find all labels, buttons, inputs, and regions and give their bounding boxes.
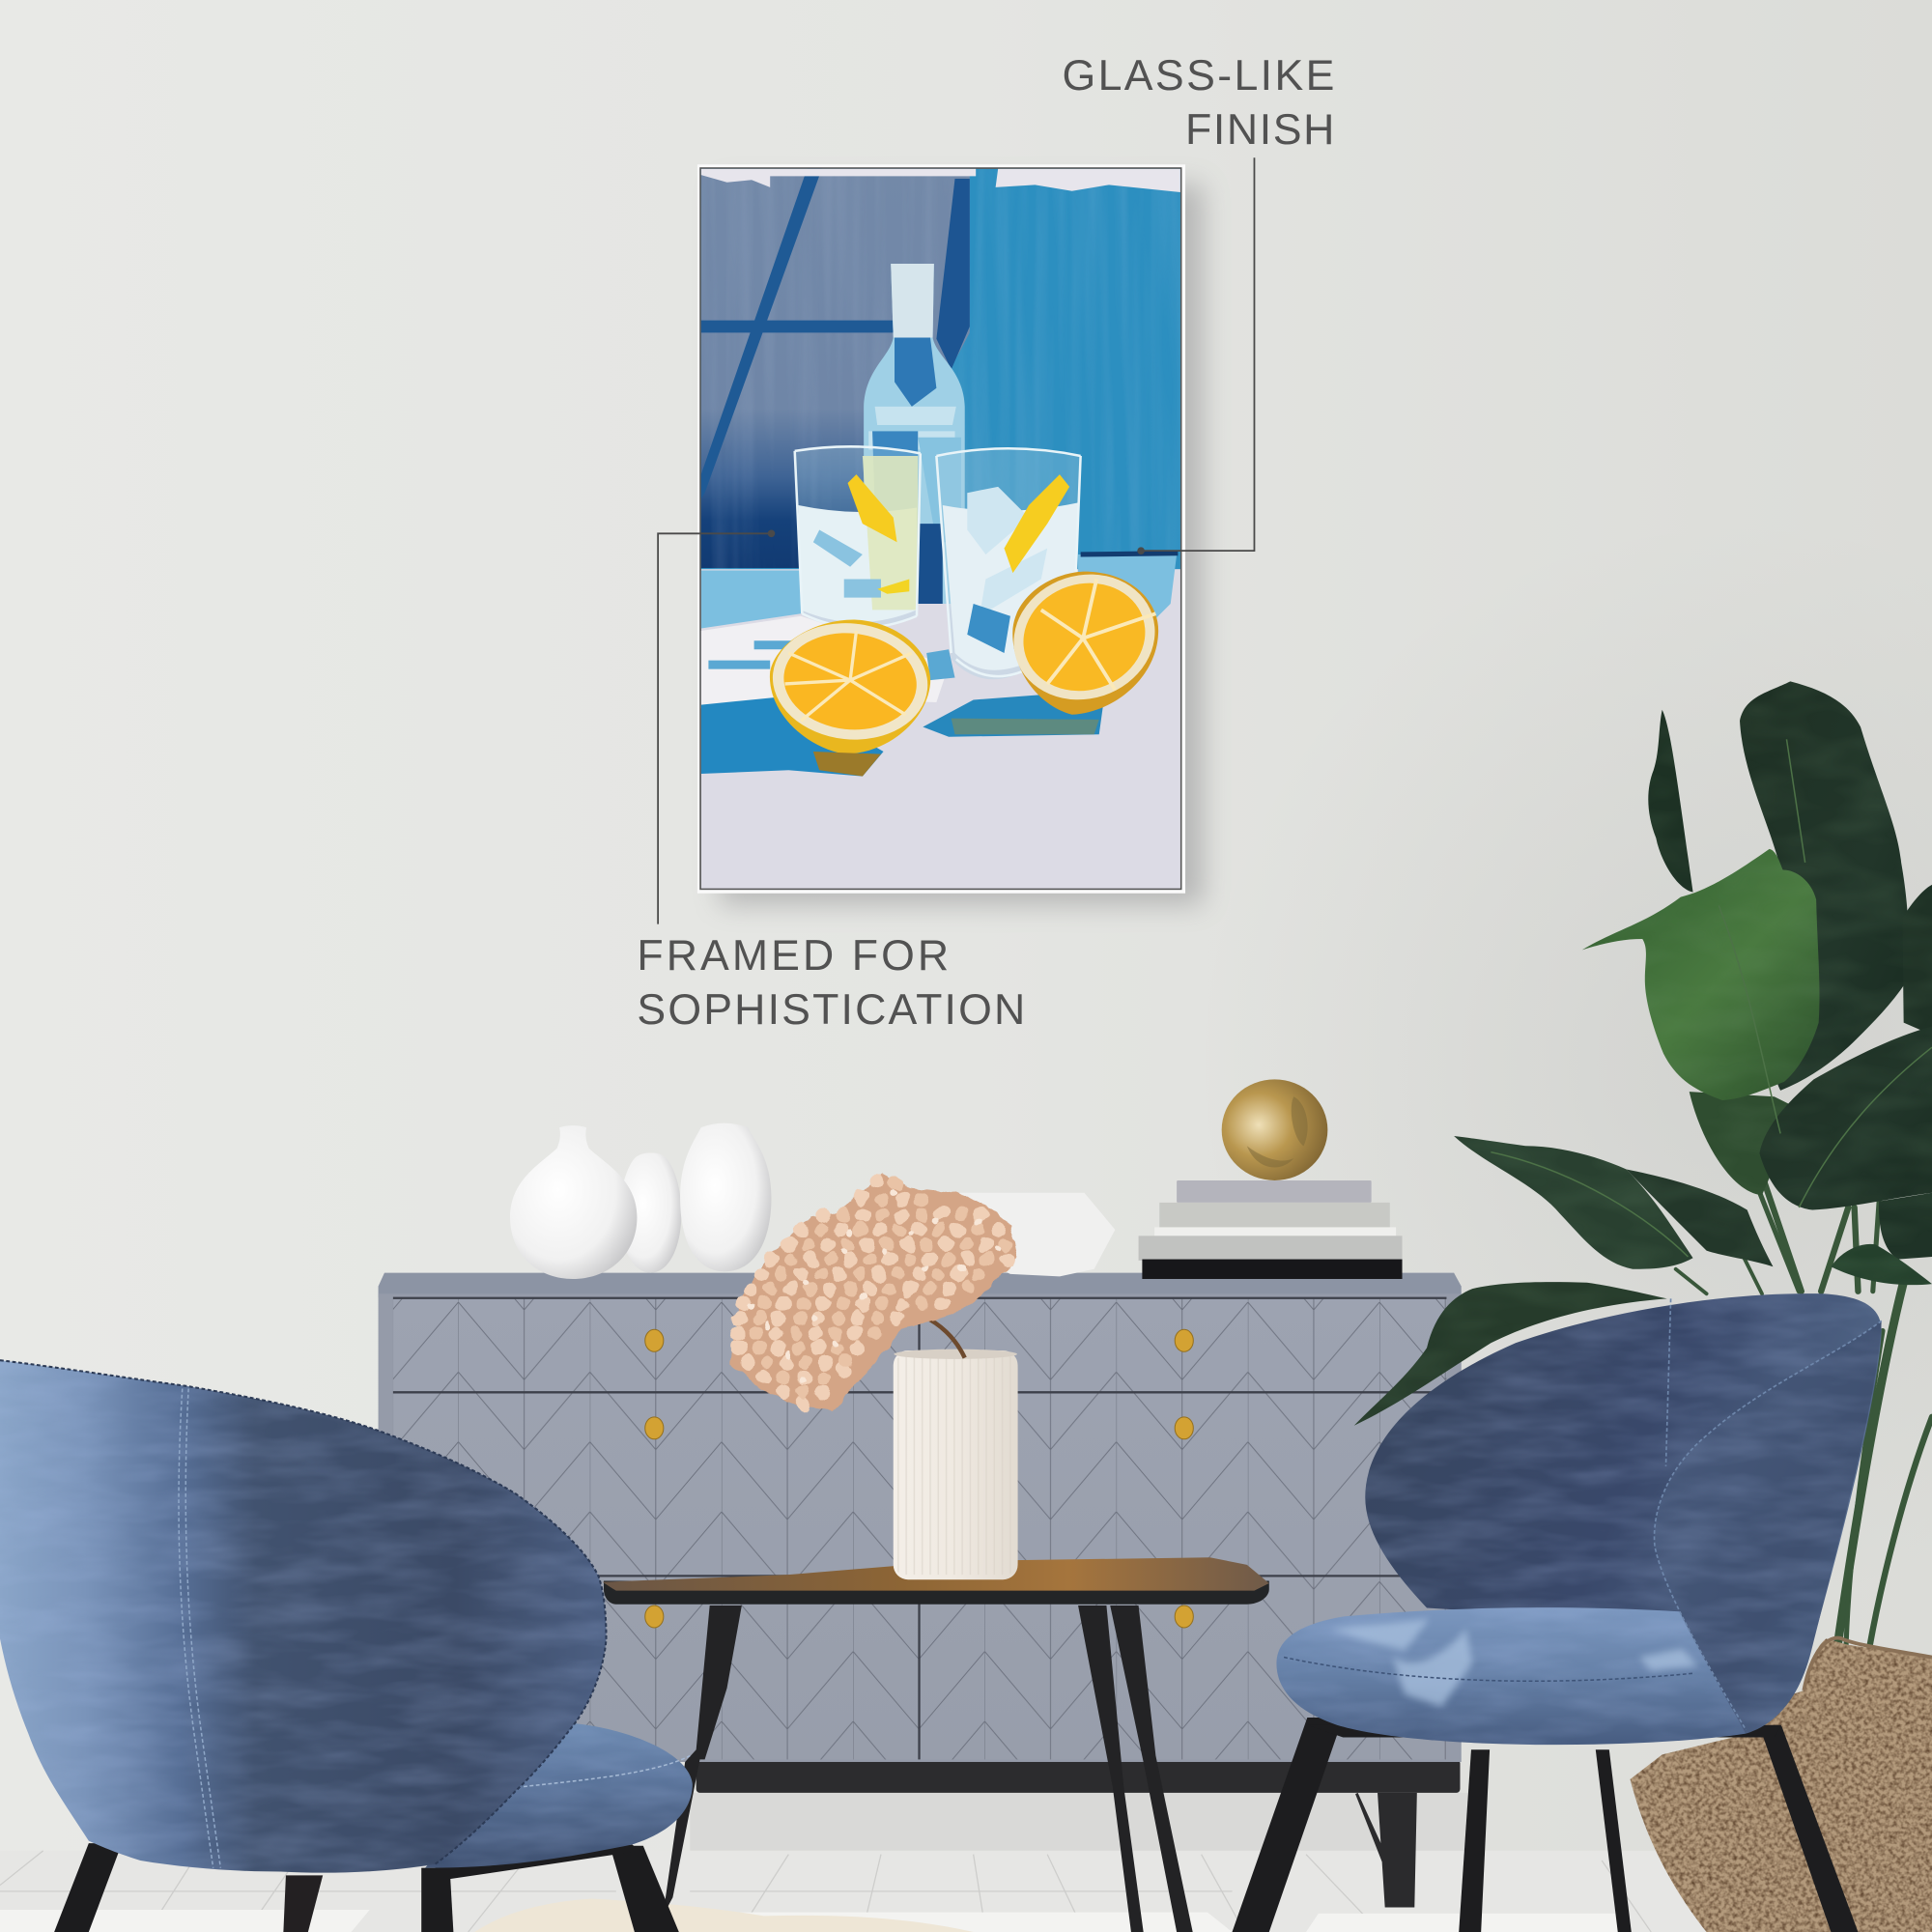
light blue table band <box>701 554 1177 629</box>
label text: GLASS-LIKE <box>1062 52 1334 99</box>
right glass <box>936 448 1081 679</box>
chair legs <box>54 1843 122 1932</box>
top unpainted edge <box>701 169 1180 192</box>
left glass <box>795 446 921 628</box>
label text: SOPHISTICATION <box>637 986 1025 1034</box>
label text: FINISH <box>1185 106 1334 154</box>
seat stitching <box>524 1756 690 1786</box>
table legs <box>663 1605 742 1916</box>
white strip and strokes <box>701 616 949 708</box>
label text <box>637 932 1025 1034</box>
gold sphere <box>1222 1079 1327 1180</box>
leaf: green centre <box>1582 849 1820 1100</box>
label text: FRAMED FOR <box>637 932 949 980</box>
leaf: right fringe <box>1902 885 1932 1035</box>
floor <box>0 1851 1932 1932</box>
brass knobs <box>645 1329 1193 1628</box>
leaf: left second <box>1627 1169 1773 1266</box>
sideboard base <box>696 1759 1460 1793</box>
window shadow bars <box>701 169 894 499</box>
plant leaves <box>1354 681 1932 1426</box>
callout: framed for sophistication <box>637 529 1025 1034</box>
chair wing <box>1655 1321 1882 1734</box>
chevron panel fronts <box>393 1298 1446 1759</box>
coffee table <box>603 1557 1269 1932</box>
chair back <box>0 1360 607 1873</box>
dark panel edge <box>936 179 970 370</box>
bottle <box>864 264 965 604</box>
frame shadow <box>720 185 1203 904</box>
label text <box>1062 52 1334 154</box>
leader line and dot <box>658 529 775 924</box>
chair inner back <box>1365 1293 1882 1669</box>
sideboard top <box>379 1273 1462 1297</box>
cast shadow left <box>701 696 884 777</box>
left chair <box>0 1360 693 1932</box>
chair legs <box>1233 1718 1343 1932</box>
leaf: right dark large <box>1759 1026 1932 1210</box>
sideboard legs <box>1355 1793 1417 1907</box>
leaf: left horizontal <box>1454 1136 1693 1269</box>
dark wall line <box>1081 551 1178 557</box>
rug <box>474 1899 974 1932</box>
leader line and dot <box>1137 157 1254 554</box>
leaf: lower right <box>1879 1193 1932 1260</box>
table surface <box>701 569 1180 890</box>
edge stitching <box>0 1360 607 1864</box>
cast shadow right <box>923 695 1103 737</box>
centre seam stitching <box>179 1389 220 1868</box>
table top rim <box>604 1580 1269 1605</box>
leaf: narrow upper <box>1648 710 1693 892</box>
leaf: small right <box>1831 1244 1932 1285</box>
seat highlights <box>1331 1619 1698 1707</box>
white frame <box>697 164 1185 894</box>
woven basket <box>1631 1638 1932 1932</box>
leaf: low left <box>1354 1282 1667 1426</box>
chair seat <box>1276 1607 1746 1745</box>
seat stitching <box>1284 1658 1694 1681</box>
right lemon half <box>1012 572 1159 715</box>
table top wood <box>603 1557 1269 1591</box>
sideboard <box>379 1273 1462 1907</box>
grey shadow panel <box>701 169 970 568</box>
painting <box>701 169 1180 890</box>
callout: glass-like finish <box>1062 52 1334 554</box>
leaf: behind green <box>1690 1092 1799 1195</box>
plant stems <box>1676 1084 1932 1663</box>
geometric white bowl <box>949 1193 1115 1276</box>
wing stitching <box>1655 1298 1882 1730</box>
stacked books <box>1139 1180 1403 1279</box>
leaf: back dark <box>1740 681 1909 1091</box>
white ceramic vases <box>510 1123 771 1279</box>
left lemon half <box>767 615 933 777</box>
leaf veins <box>1491 739 1932 1257</box>
ribbed cream vase <box>894 1350 1018 1579</box>
right chair <box>1233 1293 1882 1932</box>
blue wall in painting <box>701 169 1180 569</box>
framed artwork <box>697 164 1203 904</box>
chair seat <box>425 1722 693 1868</box>
hydrangea flowers <box>732 1173 1018 1412</box>
